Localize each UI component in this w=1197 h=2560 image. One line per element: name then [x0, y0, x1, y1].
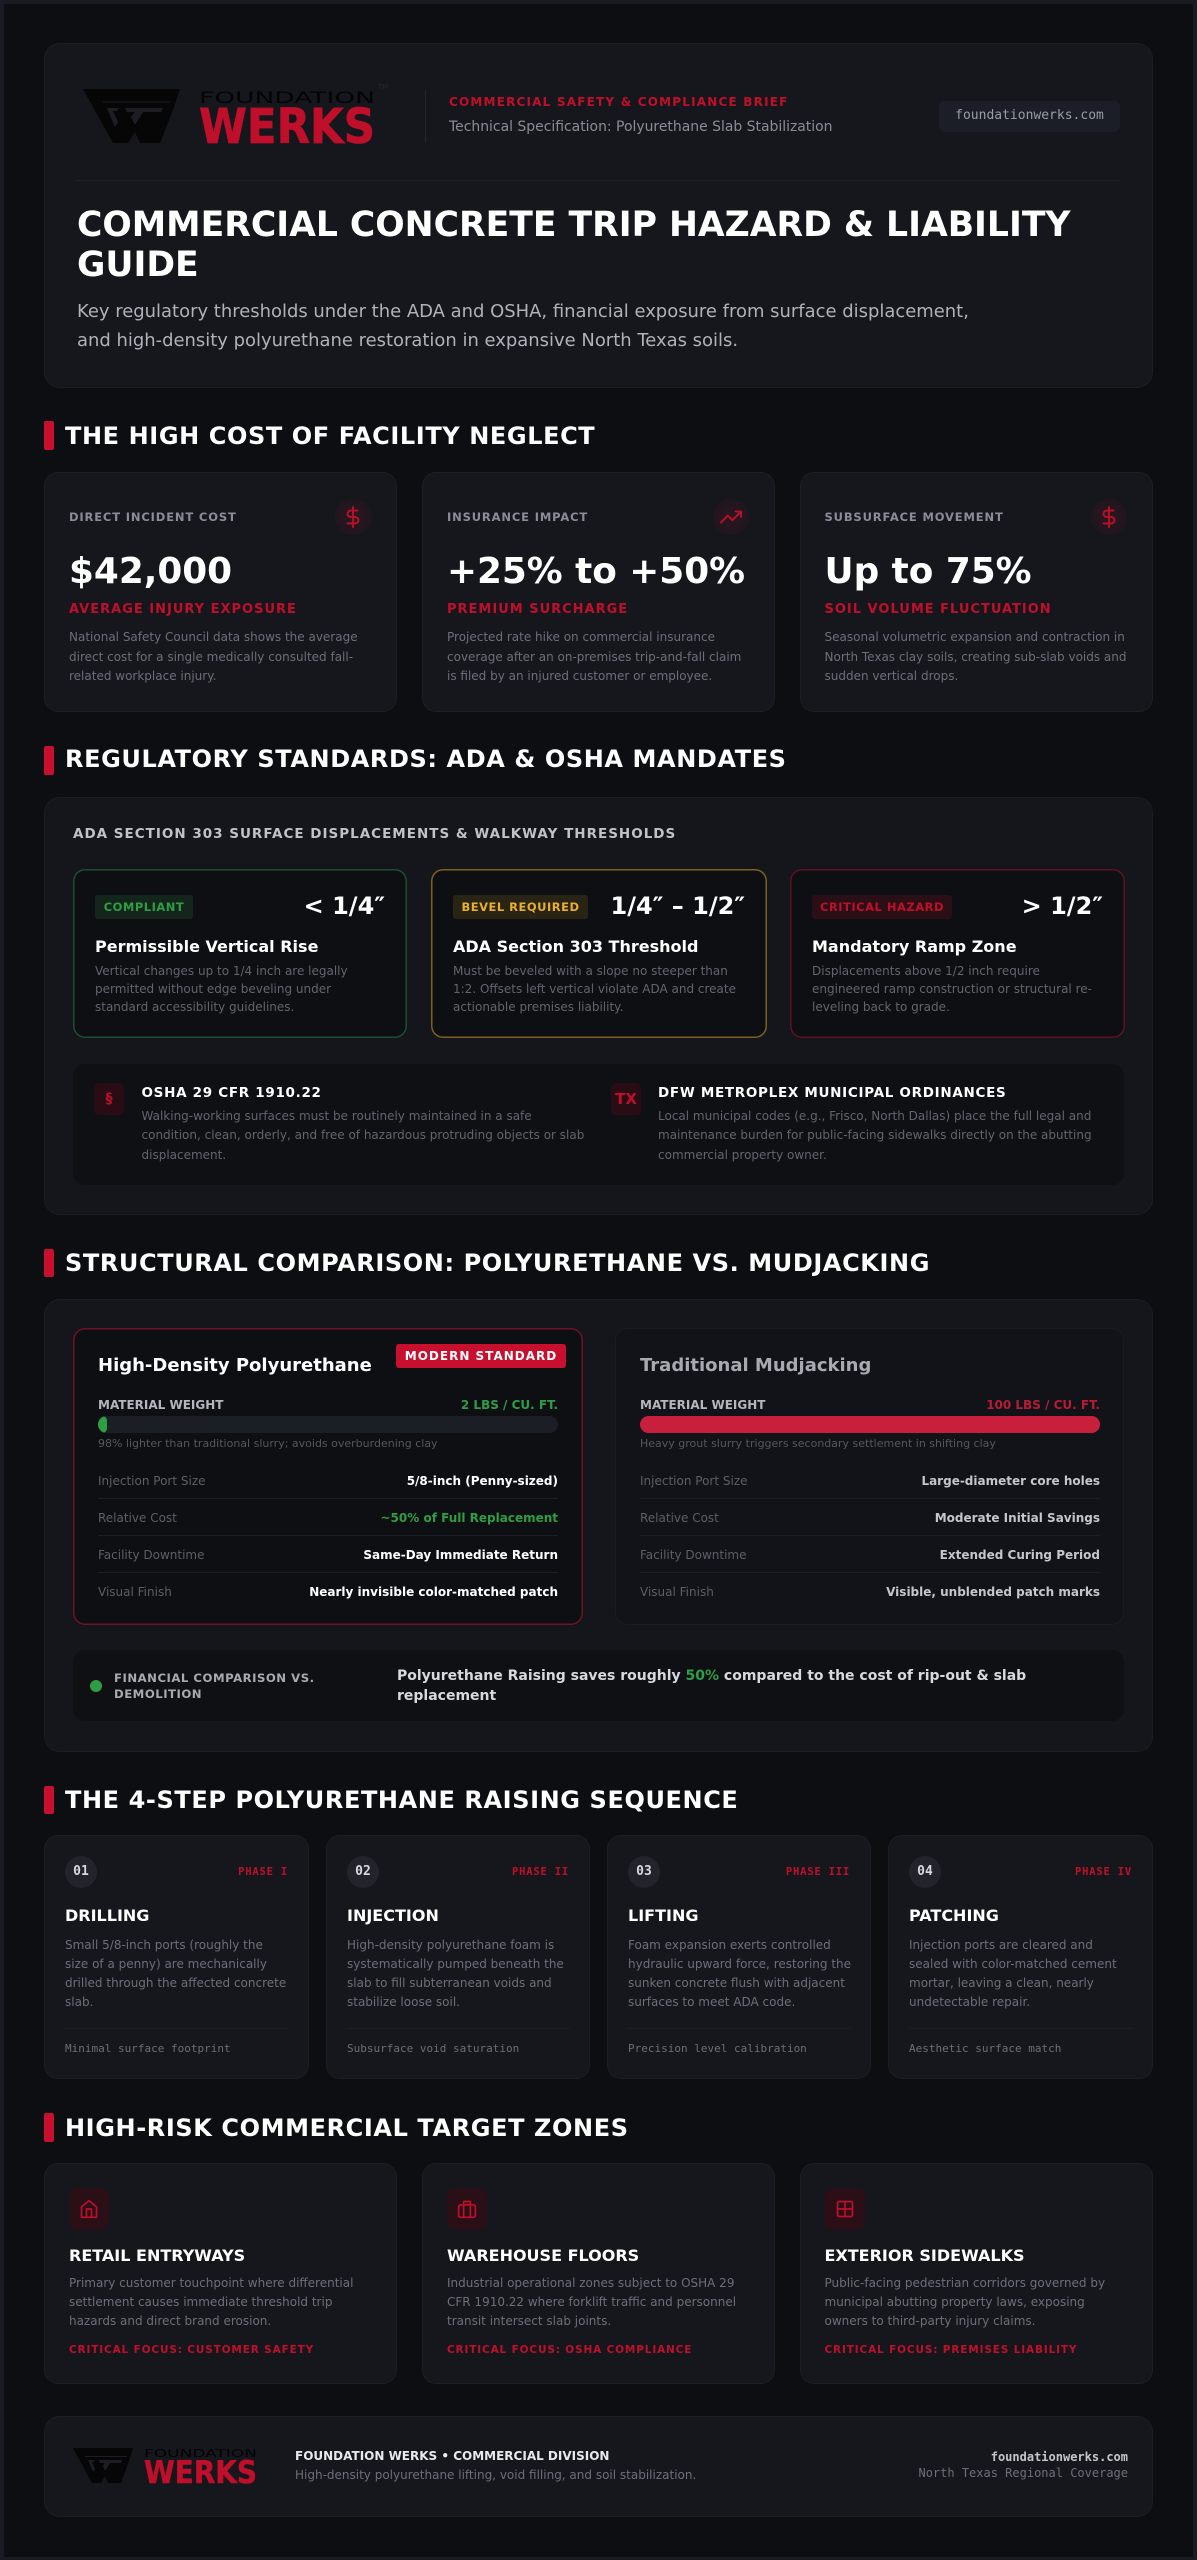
subtitle: [77, 300, 969, 350]
zone card: warehouse floors: WAREHOUSE FLOORS: [447, 2246, 639, 2265]
step card: patching: [888, 1835, 1153, 2079]
stat card: direct incident cost: [44, 472, 397, 712]
financial comparison bar: Polyurethane Raising saves roughly 50% compared to the cost of rip-out & slab: [397, 1668, 1026, 1684]
description: commercial property owner.: [658, 1148, 827, 1162]
description: hazards and direct brand erosion.: [69, 2314, 271, 2328]
step card: injection: 02: [355, 1864, 371, 1879]
description: Vertical changes up to 1/4 inch are legally: [95, 964, 348, 978]
comparison card: polyurethane: Same-Day Immediate Return: [363, 1548, 558, 1562]
comparison card: polyurethane: Facility Downtime: [98, 1548, 204, 1562]
comparison card: mudjacking: Facility Downtime: [640, 1548, 746, 1562]
logo: Foundation Werks: FOUNDATION: [199, 88, 375, 107]
logo: Foundation Werks: [83, 83, 388, 145]
icon: storefront house: [69, 2188, 109, 2230]
description: North Texas clay soils, creating sub-slab voids and: [824, 650, 1126, 664]
financial comparison bar: DEMOLITION: [114, 1687, 202, 1701]
comparison card: polyurethane: 98% lighter than traditional slurry; avoids overburdening clay: [98, 1437, 438, 1450]
description: surfaces to meet ADA code.: [628, 1995, 795, 2009]
description: actionable premises liability.: [453, 1000, 623, 1014]
description: [447, 2276, 736, 2328]
step card: lifting: Precision level calibration: [628, 2042, 807, 2055]
comparison card: polyurethane: [73, 1328, 583, 1625]
icon: trending up: [713, 499, 749, 535]
stat card: subsurface movement: Up to 75%: [824, 551, 1032, 592]
comparison card: mudjacking: Visual Finish: [640, 1585, 714, 1599]
zone card: exterior sidewalks: [800, 2163, 1153, 2384]
panel: legal notes: [73, 1064, 1124, 1185]
description: Walking-working surfaces must be routinely maintained in a safe: [142, 1108, 532, 1122]
icon: section sign: [94, 1083, 124, 1115]
comparison card: mudjacking: Injection Port Size: [640, 1474, 748, 1488]
panel: legal notes: DFW METROPLEX MUNICIPAL ORDINANCES: [658, 1085, 1006, 1101]
footer logo: FOUNDATION: [144, 2448, 257, 2460]
description: CFR 1910.22 where forklift traffic and personnel: [447, 2295, 736, 2309]
description: [628, 1938, 851, 2009]
description: [909, 1938, 1117, 2009]
step card: injection: PHASE II: [512, 1866, 569, 1878]
badge: MODERN STANDARD: [405, 1349, 557, 1363]
zone card: retail entryways: RETAIL ENTRYWAYS: [69, 2246, 245, 2265]
threshold card: compliant: Permissible Vertical Rise: [95, 937, 318, 956]
title: COMMERCIAL CONCRETE TRIP HAZARD & LIABILITY: [77, 204, 1070, 244]
step card: lifting: 03: [636, 1864, 652, 1879]
icon: section sign: §: [106, 1091, 112, 1107]
material weight bar: [98, 1416, 558, 1433]
heading: 4-step sequence: THE 4-STEP POLYURETHANE RAISING SEQUENCE: [65, 1786, 738, 1814]
description: Local municipal codes (e.g., Frisco, North Dallas) place the full legal and: [658, 1108, 1091, 1122]
comparison card: mudjacking: Visible, unblended patch marks: [886, 1585, 1100, 1599]
zone card: retail entryways: [44, 2163, 397, 2384]
subtitle: and high-density polyurethane restoration in expansive North Texas soils.: [77, 330, 738, 350]
icon: dollar: [1090, 499, 1126, 535]
heading: the high cost of facility neglect: THE HIGH COST OF FACILITY NEGLECT: [65, 422, 595, 450]
threshold card: compliant: [72, 869, 406, 1038]
description: permitted without edge beveling under: [95, 982, 331, 996]
material weight bar: [640, 1416, 1100, 1433]
comparison card: mudjacking: [615, 1328, 1124, 1625]
stat card: subsurface movement: SUBSURFACE MOVEMENT: [824, 510, 1004, 524]
stat card: insurance impact: PREMIUM SURCHARGE: [447, 602, 628, 617]
stat card: direct incident cost: $42,000: [69, 551, 232, 592]
comparison card: polyurethane: 2 LBS / CU. FT.: [461, 1398, 558, 1412]
stat card: subsurface movement: SOIL VOLUME FLUCTUATION: [824, 602, 1052, 617]
description: [812, 964, 1092, 1014]
description: leveling back to grade.: [812, 1000, 950, 1014]
website pill: foundationwerks.com: [955, 108, 1104, 123]
panel: structural comparison: [44, 1299, 1153, 1752]
step card: drilling: DRILLING: [65, 1906, 149, 1925]
title: GUIDE: [77, 244, 199, 284]
step card: drilling: PHASE I: [238, 1866, 288, 1878]
description: is filed by an injured customer or employee.: [447, 669, 712, 683]
description: [347, 1938, 564, 2009]
description: engineered ramp construction or structural re-: [812, 982, 1092, 996]
comparison card: polyurethane: MATERIAL WEIGHT: [98, 1398, 223, 1412]
description: [824, 630, 1126, 683]
description: Small 5/8-inch ports (roughly the: [65, 1938, 263, 1952]
stat card: insurance impact: [422, 472, 775, 712]
comparison card: polyurethane: 5/8-inch (Penny-sized): [407, 1474, 558, 1488]
comparison card: mudjacking: MATERIAL WEIGHT: [640, 1398, 765, 1412]
financial comparison bar: [73, 1650, 1124, 1721]
brief subtitle: Technical Specification: Polyurethane Slab Stabilization: [449, 119, 833, 135]
description: mortar, leaving a clean, nearly: [909, 1976, 1094, 1990]
comparison card: polyurethane: Relative Cost: [98, 1511, 177, 1525]
stat card: direct incident cost: AVERAGE INJURY EXPOSURE: [69, 602, 297, 617]
financial comparison bar: replacement: [397, 1688, 496, 1704]
threshold card: compliant: COMPLIANT: [104, 900, 184, 914]
icon: TX: [611, 1083, 641, 1115]
badge: [396, 1344, 566, 1368]
footer: [44, 2416, 1153, 2517]
description: [142, 1108, 584, 1162]
description: [658, 1108, 1092, 1162]
description: slab.: [65, 1995, 93, 2009]
zone card: retail entryways: CRITICAL FOCUS: CUSTOMER SAFETY: [69, 2344, 314, 2356]
logo: Foundation Werks: TM: [377, 83, 388, 91]
comparison card: mudjacking: Moderate Initial Savings: [935, 1511, 1100, 1525]
stat card: insurance impact: INSURANCE IMPACT: [447, 510, 588, 524]
description: size of a penny) are mechanically: [65, 1957, 267, 1971]
step card: patching: 04: [917, 1864, 933, 1879]
description: owners to third-party injury claims.: [824, 2314, 1035, 2328]
comparison card: polyurethane: ~50% of Full Replacement: [380, 1511, 558, 1525]
description: related workplace injury.: [69, 669, 216, 683]
description: [447, 630, 741, 683]
panel subheading: ADA SECTION 303 SURFACE DISPLACEMENTS & WALKWAY THRESHOLDS: [73, 826, 676, 842]
header panel: [44, 43, 1153, 388]
threshold card: bevel required: ADA Section 303 Threshold: [453, 937, 698, 956]
description: [65, 1938, 286, 2009]
threshold card: bevel required: BEVEL REQUIRED: [461, 900, 580, 914]
zone card: warehouse floors: CRITICAL FOCUS: OSHA COMPLIANCE: [447, 2344, 692, 2356]
description: undetectable repair.: [909, 1995, 1030, 2009]
description: municipal abutting property laws, exposing: [824, 2295, 1085, 2309]
website pill: [939, 101, 1120, 132]
description: Projected rate hike on commercial insurance: [447, 630, 715, 644]
comparison card: mudjacking: Extended Curing Period: [940, 1548, 1100, 1562]
footer: High-density polyurethane lifting, void filling, and soil stabilization.: [295, 2468, 696, 2482]
description: Must be beveled with a slope no steeper than: [453, 964, 728, 978]
threshold card: critical hazard: Mandatory Ramp Zone: [812, 937, 1017, 956]
description: Displacements above 1/2 inch require: [812, 964, 1040, 978]
threshold card: bevel required: 1/4″ – 1/2″: [611, 892, 745, 920]
description: direct cost for a single medically consulted fall-: [69, 650, 353, 664]
description: slab to fill subterranean voids and: [347, 1976, 552, 1990]
description: drilled through the affected concrete: [65, 1976, 286, 1990]
threshold card: bevel required: [430, 869, 766, 1038]
description: Public-facing pedestrian corridors governed by: [824, 2276, 1105, 2290]
zone card: exterior sidewalks: EXTERIOR SIDEWALKS: [824, 2246, 1024, 2265]
description: [824, 2276, 1105, 2328]
threshold card: critical hazard: [790, 869, 1124, 1038]
description: displacement.: [142, 1148, 226, 1162]
step card: drilling: 01: [73, 1864, 89, 1879]
description: coverage after an on-premises trip-and-fall claim: [447, 650, 741, 664]
stat card: direct incident cost: DIRECT INCIDENT COST: [69, 510, 237, 524]
description: [69, 2276, 353, 2328]
description: sunken concrete flush with adjacent: [628, 1976, 845, 1990]
comparison card: mudjacking: Heavy grout slurry triggers secondary settlement in shifting clay: [640, 1437, 996, 1450]
footer: FOUNDATION WERKS • COMMERCIAL DIVISION: [295, 2449, 609, 2463]
description: [95, 964, 348, 1014]
icon: grid: [824, 2188, 864, 2230]
description: standard accessibility guidelines.: [95, 1000, 294, 1014]
description: Primary customer touchpoint where differential: [69, 2276, 353, 2290]
description: transit intersect slab joints.: [447, 2314, 611, 2328]
icon: dollar: [335, 499, 371, 535]
description: Injection ports are cleared and: [909, 1938, 1093, 1952]
description: [453, 964, 736, 1014]
financial comparison bar: FINANCIAL COMPARISON VS.: [114, 1671, 315, 1685]
zone card: exterior sidewalks: CRITICAL FOCUS: PREMISES LIABILITY: [824, 2344, 1077, 2356]
footer: foundationwerks.com: [991, 2450, 1128, 2464]
comparison card: polyurethane: Injection Port Size: [98, 1474, 206, 1488]
step card: lifting: PHASE III: [786, 1866, 850, 1878]
description: National Safety Council data shows the average: [69, 630, 358, 644]
stat card: subsurface movement: [800, 472, 1153, 712]
threshold card: critical hazard: CRITICAL HAZARD: [820, 900, 944, 914]
heading: structural comparison: STRUCTURAL COMPARISON: POLYURETHANE VS. MUDJACKING: [65, 1249, 930, 1277]
description: Industrial operational zones subject to OSHA 29: [447, 2276, 734, 2290]
step card: injection: Subsurface void saturation: [347, 2042, 519, 2055]
comparison card: polyurethane: High-Density Polyurethane: [98, 1355, 372, 1376]
icon: briefcase: [447, 2188, 487, 2230]
description: sudden vertical drops.: [824, 669, 958, 683]
comparison card: mudjacking: 100 LBS / CU. FT.: [986, 1398, 1100, 1412]
comparison card: mudjacking: Large-diameter core holes: [921, 1474, 1100, 1488]
threshold card: compliant: < 1/4″: [304, 892, 385, 920]
step card: patching: PHASE IV: [1075, 1866, 1132, 1878]
description: sealed with color-matched cement: [909, 1957, 1117, 1971]
description: Seasonal volumetric expansion and contraction in: [824, 630, 1125, 644]
zone card: warehouse floors: [422, 2163, 775, 2384]
footer: North Texas Regional Coverage: [918, 2466, 1128, 2480]
description: settlement causes immediate threshold trip: [69, 2295, 332, 2309]
comparison card: mudjacking: Traditional Mudjacking: [640, 1355, 871, 1376]
step card: injection: [326, 1835, 590, 2079]
stat card: insurance impact: +25% to +50%: [447, 551, 745, 592]
title: [77, 204, 1071, 284]
step card: injection: INJECTION: [347, 1906, 439, 1925]
step card: lifting: [607, 1835, 871, 2079]
description: hydraulic upward force, restoring the: [628, 1957, 851, 1971]
step card: patching: PATCHING: [909, 1906, 999, 1925]
description: systematically pumped beneath the: [347, 1957, 564, 1971]
heading: regulatory standards: REGULATORY STANDARDS: ADA & OSHA MANDATES: [65, 745, 787, 773]
panel: legal notes: OSHA 29 CFR 1910.22: [142, 1085, 322, 1101]
comparison card: mudjacking: Relative Cost: [640, 1511, 719, 1525]
description: condition, clean, orderly, and free of hazardous protruding objects or slab: [142, 1128, 584, 1142]
comparison card: polyurethane: Nearly invisible color-matched patch: [309, 1585, 558, 1599]
panel: regulatory thresholds: [44, 797, 1153, 1215]
step card: drilling: [44, 1835, 309, 2079]
heading: target zones: HIGH-RISK COMMERCIAL TARGET ZONES: [65, 2114, 629, 2142]
comparison card: polyurethane: Visual Finish: [98, 1585, 172, 1599]
step card: patching: Aesthetic surface match: [909, 2042, 1061, 2055]
description: 1:2. Offsets left vertical violate ADA and create: [453, 982, 736, 996]
step card: lifting: LIFTING: [628, 1906, 698, 1925]
threshold card: critical hazard: > 1/2″: [1022, 892, 1103, 920]
description: stabilize loose soil.: [347, 1995, 460, 2009]
description: [69, 630, 358, 683]
description: Foam expansion exerts controlled: [628, 1938, 831, 1952]
step card: drilling: Minimal surface footprint: [65, 2042, 231, 2055]
description: High-density polyurethane foam is: [347, 1938, 554, 1952]
description: maintenance burden for public-facing sidewalks directly on the abutting: [658, 1128, 1092, 1142]
brief label: COMMERCIAL SAFETY & COMPLIANCE BRIEF: [449, 95, 789, 109]
icon: TX: TX: [615, 1090, 637, 1108]
subtitle: Key regulatory thresholds under the ADA and OSHA, financial exposure from surface displacement,: [77, 300, 969, 322]
footer logo: [73, 2448, 257, 2486]
